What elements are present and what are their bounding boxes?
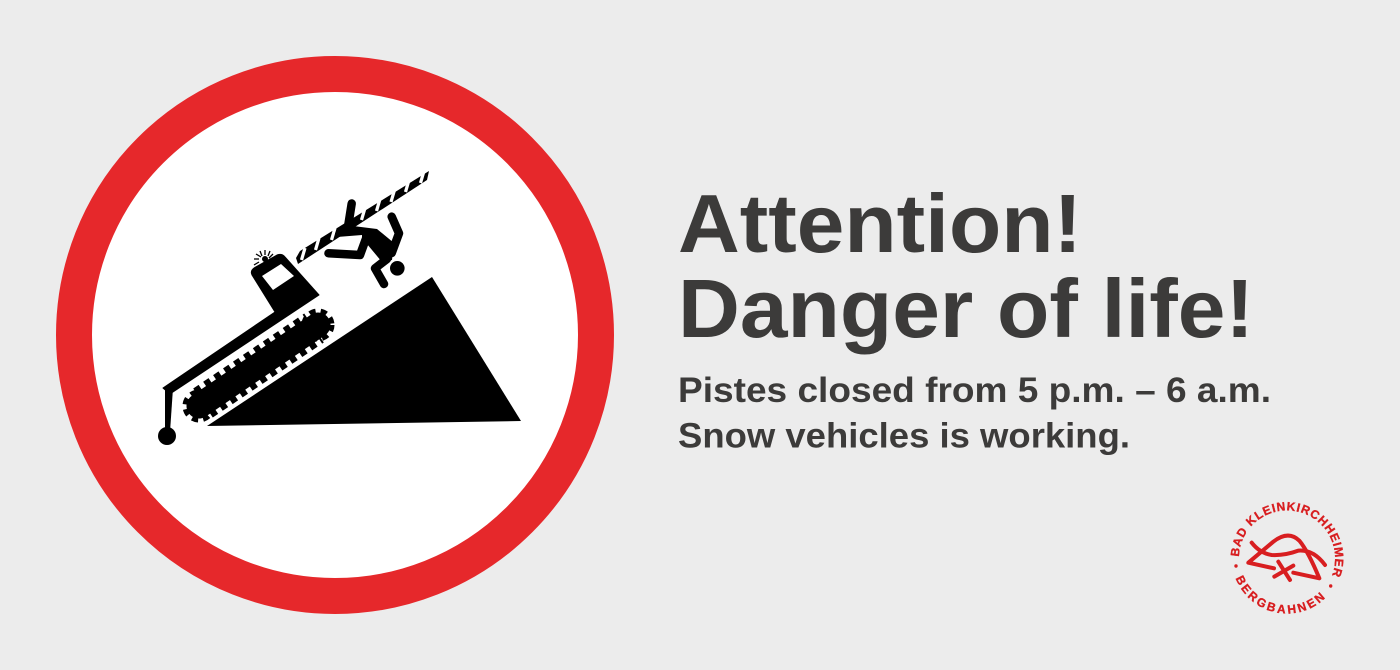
logo ring text bottom: BERGBAHNEN: [1236, 575, 1325, 614]
closing hours: Pistes closed from 5 p.m. – 6 a.m.: [678, 370, 1271, 410]
logo mountain mark: [1248, 536, 1325, 580]
vehicles notice: Snow vehicles is working.: [678, 416, 1130, 456]
icon: falling person: [328, 204, 405, 284]
logo: Bad Kleinkirchheimer Bergbahnen: [1230, 502, 1344, 614]
cab window: [262, 264, 294, 290]
warning sign: [74, 74, 596, 596]
sign ring: [74, 74, 596, 596]
groomer track: [186, 312, 332, 420]
subtext: [678, 370, 1271, 456]
flashing beacon: [254, 250, 273, 265]
icon: slope: [207, 277, 521, 426]
icon: snow groomer: [158, 250, 332, 445]
logo ring text top: BAD KLEINKIRCHHEIMER: [1230, 502, 1344, 577]
blade arm and ball: [158, 388, 176, 445]
heading: [678, 178, 1254, 355]
logo dots: [1234, 564, 1332, 588]
icon: striped barrier: [296, 171, 429, 264]
heading line 2: Danger of life!: [678, 263, 1254, 355]
groomer body and cab: [163, 254, 319, 394]
heading line 1: Attention!: [678, 178, 1082, 270]
